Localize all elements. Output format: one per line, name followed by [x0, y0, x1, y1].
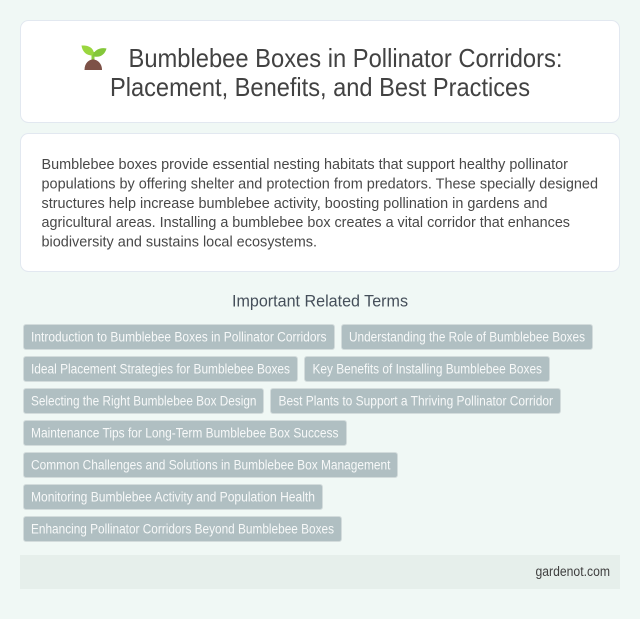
tag: placement: Ideal Placement Strategies for Bumblebee Boxes: [31, 362, 290, 376]
tag: challenges: Common Challenges and Solutions in Bumblebee Box Management: [31, 458, 391, 472]
tag: monitoring: Monitoring Bumblebee Activity and Population Health: [31, 490, 315, 504]
tag: maintenance: Maintenance Tips for Long-Term Bumblebee Box Success: [31, 426, 339, 440]
tag: benefits: Key Benefits of Installing Bumblebee Boxes: [312, 362, 542, 376]
text block: description: populations by offering shelter and protection from predators. These specially designed: [42, 175, 598, 192]
tag: challenges: [24, 452, 398, 478]
text block: description: biodiversity and sustains local ecosystems.: [42, 233, 317, 250]
tag list: [24, 324, 592, 542]
tag: role: [342, 324, 592, 350]
tag: monitoring: [24, 484, 322, 510]
tag: introduction: Introduction to Bumblebee Boxes in Pollinator Corridors: [31, 330, 327, 344]
tag: enhancing: Enhancing Pollinator Corridors Beyond Bumblebee Boxes: [31, 522, 334, 536]
tag: role: Understanding the Role of Bumblebee Boxes: [349, 330, 585, 344]
tag: plants: [270, 388, 560, 414]
title: Bumblebee Boxes in Pollinator Corridors:: [128, 43, 562, 73]
tag: placement: [24, 356, 298, 382]
tag: benefits: [304, 356, 550, 382]
text block: description: agricultural areas. Installing a bumblebee box creates a vital corridor that enhances: [42, 214, 570, 231]
tag: maintenance: [24, 420, 346, 446]
title: Placement, Benefits, and Best Practices: [110, 72, 530, 102]
tag: design: [24, 388, 264, 414]
heading: important related terms: Important Related Terms: [232, 292, 408, 310]
panel: description card: [20, 134, 620, 272]
icon: seedling: [82, 45, 106, 70]
text block: description: Bumblebee boxes provide essential nesting habitats that support healthy pollinator: [42, 156, 568, 173]
tag: design: Selecting the Right Bumblebee Box Design: [31, 394, 256, 408]
text block: description: structures help increase bumblebee activity, boosting pollination in gardens and: [42, 195, 548, 212]
panel: title card: [20, 20, 620, 122]
footer: [20, 555, 620, 589]
footer text: site name: gardenot.com: [536, 564, 610, 579]
tag: introduction: [24, 324, 334, 350]
tag: enhancing: [24, 516, 342, 542]
tag: plants: Best Plants to Support a Thriving Pollinator Corridor: [278, 394, 553, 408]
